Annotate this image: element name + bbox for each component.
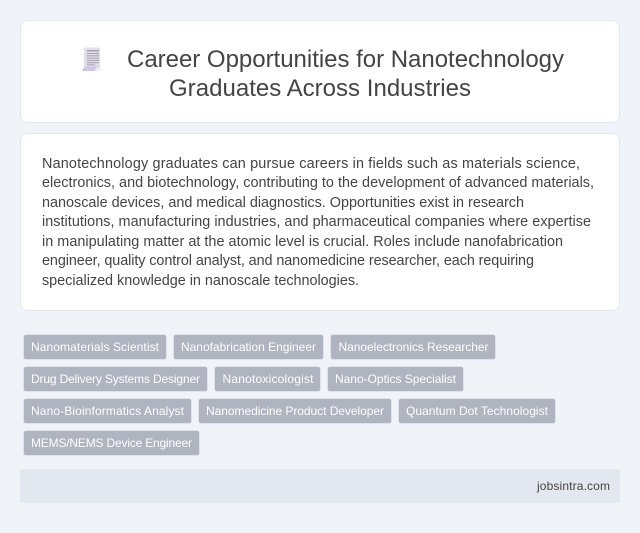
description text: specialized knowledge in nanoscale technologies. bbox=[42, 273, 359, 289]
tag: Nanoelectronics Researcher bbox=[330, 334, 496, 360]
tag: MEMS/NEMS Device Engineer: MEMS/NEMS Device Engineer bbox=[31, 436, 192, 450]
title: Graduates Across Industries bbox=[169, 75, 471, 102]
tag: Nano-Optics Specialist: Nano-Optics Specialist bbox=[335, 372, 457, 386]
description text: nanoscale devices, and medical diagnostics. Opportunities exist in research bbox=[42, 195, 524, 211]
tag: Nanofabrication Engineer bbox=[174, 334, 324, 360]
tag: Drug Delivery Systems Designer: Drug Delivery Systems Designer bbox=[31, 372, 200, 386]
description text bbox=[42, 156, 594, 289]
tag: Quantum Dot Technologist bbox=[398, 398, 556, 424]
title bbox=[127, 46, 564, 102]
tag: MEMS/NEMS Device Engineer bbox=[24, 430, 200, 456]
tag: Nano-Bioinformatics Analyst bbox=[24, 398, 192, 424]
tag: Nanoelectronics Researcher: Nanoelectronics Researcher bbox=[338, 340, 488, 354]
description text: Nanotechnology graduates can pursue careers in fields such as materials science, bbox=[42, 156, 580, 172]
description text: engineer, quality control analyst, and nanomedicine researcher, each requiring bbox=[42, 253, 534, 269]
description text: electronics, and biotechnology, contributing to the development of advanced materials, bbox=[42, 175, 594, 191]
panel: title card bbox=[20, 20, 620, 122]
panel: description bbox=[20, 134, 620, 310]
tag: Nanotoxicologist bbox=[214, 366, 320, 392]
title: Career Opportunities for Nanotechnology bbox=[127, 46, 564, 73]
panel: career tags bbox=[24, 334, 556, 456]
tag: Quantum Dot Technologist: Quantum Dot Technologist bbox=[406, 404, 549, 418]
tag: Nanotoxicologist: Nanotoxicologist bbox=[222, 372, 314, 386]
description text: institutions, manufacturing industries, and pharmaceutical companies where expertise bbox=[42, 214, 591, 230]
description text: in manipulating matter at the atomic level is crucial. Roles include nanofabrication bbox=[42, 234, 563, 250]
tag: Nanomaterials Scientist: Nanomaterials Scientist bbox=[31, 340, 160, 354]
footer bbox=[20, 469, 620, 503]
tag: Nanomedicine Product Developer bbox=[198, 398, 392, 424]
tag: Nano-Bioinformatics Analyst: Nano-Bioinformatics Analyst bbox=[31, 404, 185, 418]
tag: Nano-Optics Specialist bbox=[328, 366, 464, 392]
tag: Nanofabrication Engineer: Nanofabrication Engineer bbox=[181, 340, 316, 354]
tag: Nanomedicine Product Developer: Nanomedicine Product Developer bbox=[206, 404, 384, 418]
tag: Drug Delivery Systems Designer bbox=[24, 366, 208, 392]
tag: Nanomaterials Scientist bbox=[24, 334, 166, 360]
footer text: jobsintra.com bbox=[536, 479, 610, 493]
icon: paper scroll document bbox=[82, 48, 101, 71]
